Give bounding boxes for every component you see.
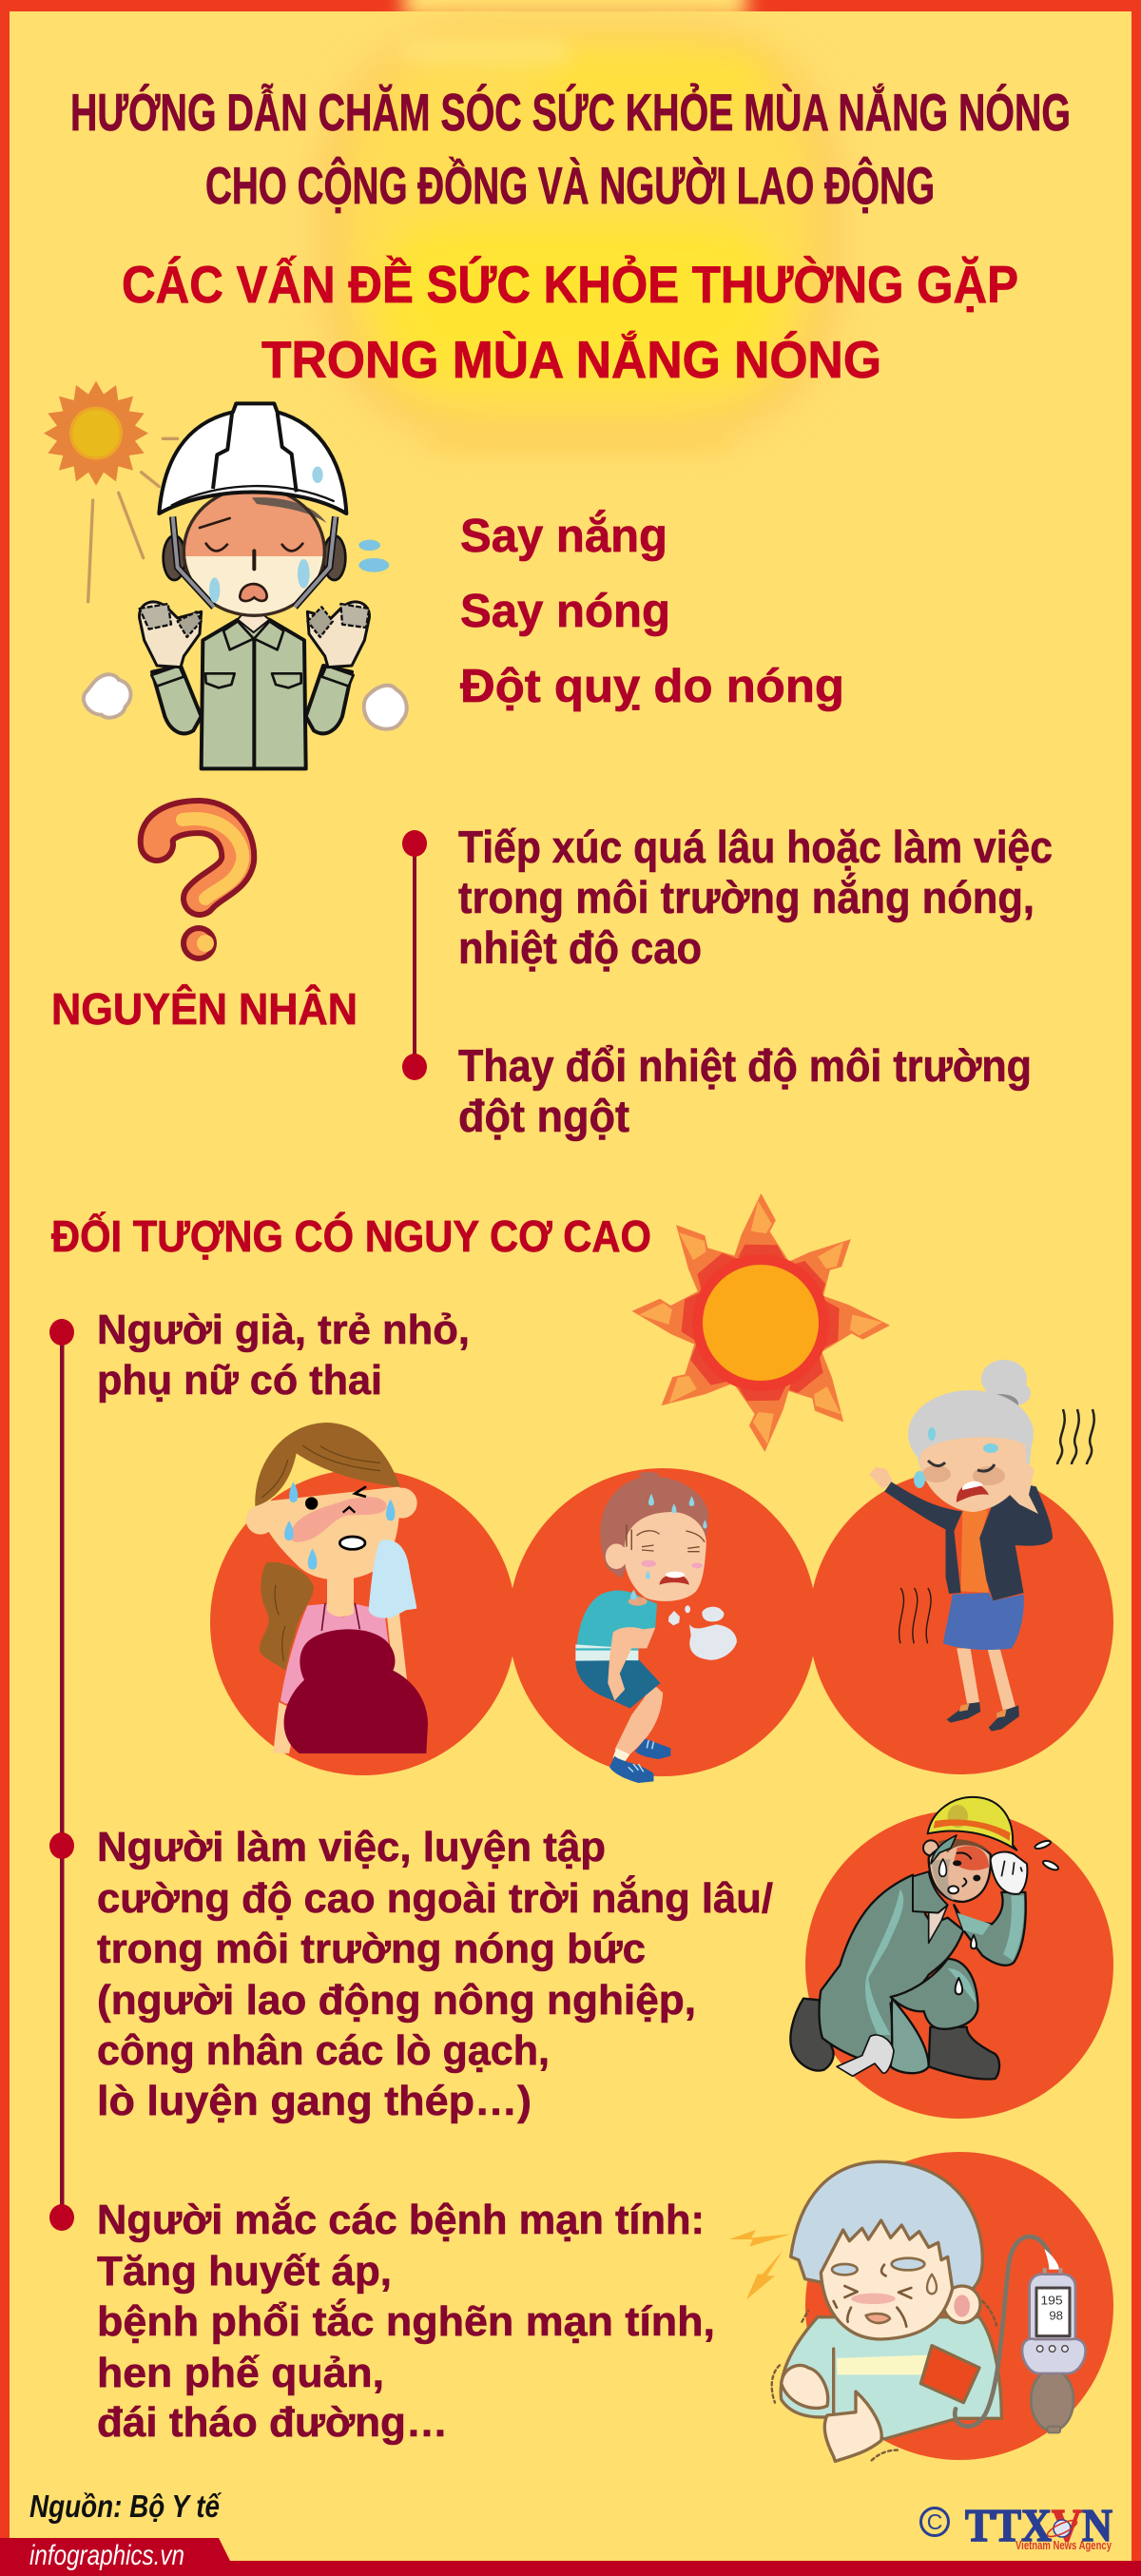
cause 2: Thay đổi nhiệt độ môi trường	[458, 1040, 1032, 1091]
orange circle: worker	[805, 1811, 1113, 2119]
cause 1: Tiếp xúc quá lâu hoặc làm việc	[458, 822, 1053, 872]
title	[70, 83, 1071, 215]
cause 1: trong môi trường nắng nóng,	[458, 872, 1035, 922]
cause 2	[458, 1040, 1032, 1141]
symptoms list: Say nắng	[460, 510, 667, 562]
illustration: pregnant woman	[246, 1423, 428, 1753]
orange circles	[210, 1468, 1113, 1776]
sweat drops	[956, 1839, 1059, 1994]
icon: question mark	[157, 817, 242, 961]
icon: small sun	[44, 381, 178, 602]
blood pressure device	[1022, 2268, 1086, 2432]
shaking lines	[1057, 1409, 1094, 1464]
worker body	[151, 611, 354, 768]
risk group 2 text: Người làm việc, luyện tập	[97, 1824, 606, 1870]
symptoms list	[460, 510, 844, 712]
risk group 3 text: đái tháo đường…	[97, 2399, 448, 2446]
risk group 2 text: trong môi trường nóng bức	[97, 1926, 646, 1972]
icon: big sun	[629, 1192, 891, 1453]
blood pressure device: 195	[1040, 2294, 1063, 2307]
blurred sun behind title	[319, 0, 841, 452]
risk group 2 text	[97, 1824, 773, 2124]
cause 1	[458, 822, 1053, 973]
cough puffs	[668, 1605, 737, 1660]
risk group 2 text: (người lao động nông nghiệp,	[97, 1977, 696, 2024]
subtitle: CÁC VẤN ĐỀ SỨC KHỎE THƯỜNG GẶP	[122, 255, 1018, 314]
illustration: old man with blood pressure monitor	[729, 2161, 1086, 2461]
source note: Nguồn: Bộ Y tế	[29, 2489, 222, 2524]
symptoms list: Say nóng	[460, 586, 670, 637]
orange circle: old man	[805, 2152, 1113, 2460]
worker head	[164, 485, 389, 615]
cause 2: đột ngột	[458, 1091, 629, 1141]
helmet	[159, 403, 346, 513]
risk timeline	[49, 1319, 74, 2231]
risk group 3 text: Tăng huyết áp,	[97, 2248, 392, 2295]
illustration: kneeling worker	[790, 1797, 1059, 2079]
risk group 1 text	[97, 1307, 470, 1404]
illustration: hot worker with sun	[44, 381, 407, 768]
steam puffs	[84, 674, 407, 729]
risk group 2 text: công nhân các lò gạch,	[97, 2027, 550, 2074]
causes timeline	[402, 830, 427, 1080]
heading: causes: NGUYÊN NHÂN	[51, 984, 358, 1034]
website tab: infographics.vn	[29, 2540, 184, 2571]
risk group 3 text	[97, 2196, 715, 2446]
cause 1: nhiệt độ cao	[458, 922, 702, 973]
risk group 1 text: Người già, trẻ nhỏ,	[97, 1307, 470, 1353]
subtitle	[122, 255, 1018, 389]
website tab	[0, 2538, 231, 2576]
illustration: old woman	[869, 1360, 1094, 1732]
worker hands	[140, 602, 369, 668]
logo: TTXVN: C	[927, 2509, 942, 2534]
risk group 2 text: lò luyện gang thép…)	[97, 2078, 532, 2124]
subtitle: TRONG MÙA NẮNG NÓNG	[261, 330, 881, 389]
risk group 1 text: phụ nữ có thai	[97, 1357, 382, 1404]
risk group 3 text: bệnh phổi tắc nghẽn mạn tính,	[97, 2297, 715, 2345]
risk group 2 text: cường độ cao ngoài trời nắng lâu/	[97, 1874, 773, 1922]
risk group 3 text: hen phế quản,	[97, 2350, 384, 2396]
illustration: coughing boy	[575, 1472, 737, 1783]
blood pressure device: 98	[1049, 2309, 1063, 2322]
risk group 3 text: Người mắc các bệnh mạn tính:	[97, 2196, 705, 2243]
symptoms list: Đột quỵ do nóng	[460, 661, 844, 712]
heading: high risk groups: ĐỐI TƯỢNG CÓ NGUY CƠ CAO	[51, 1211, 651, 1261]
logo: TTXVN: TTXVN	[965, 2499, 1112, 2551]
